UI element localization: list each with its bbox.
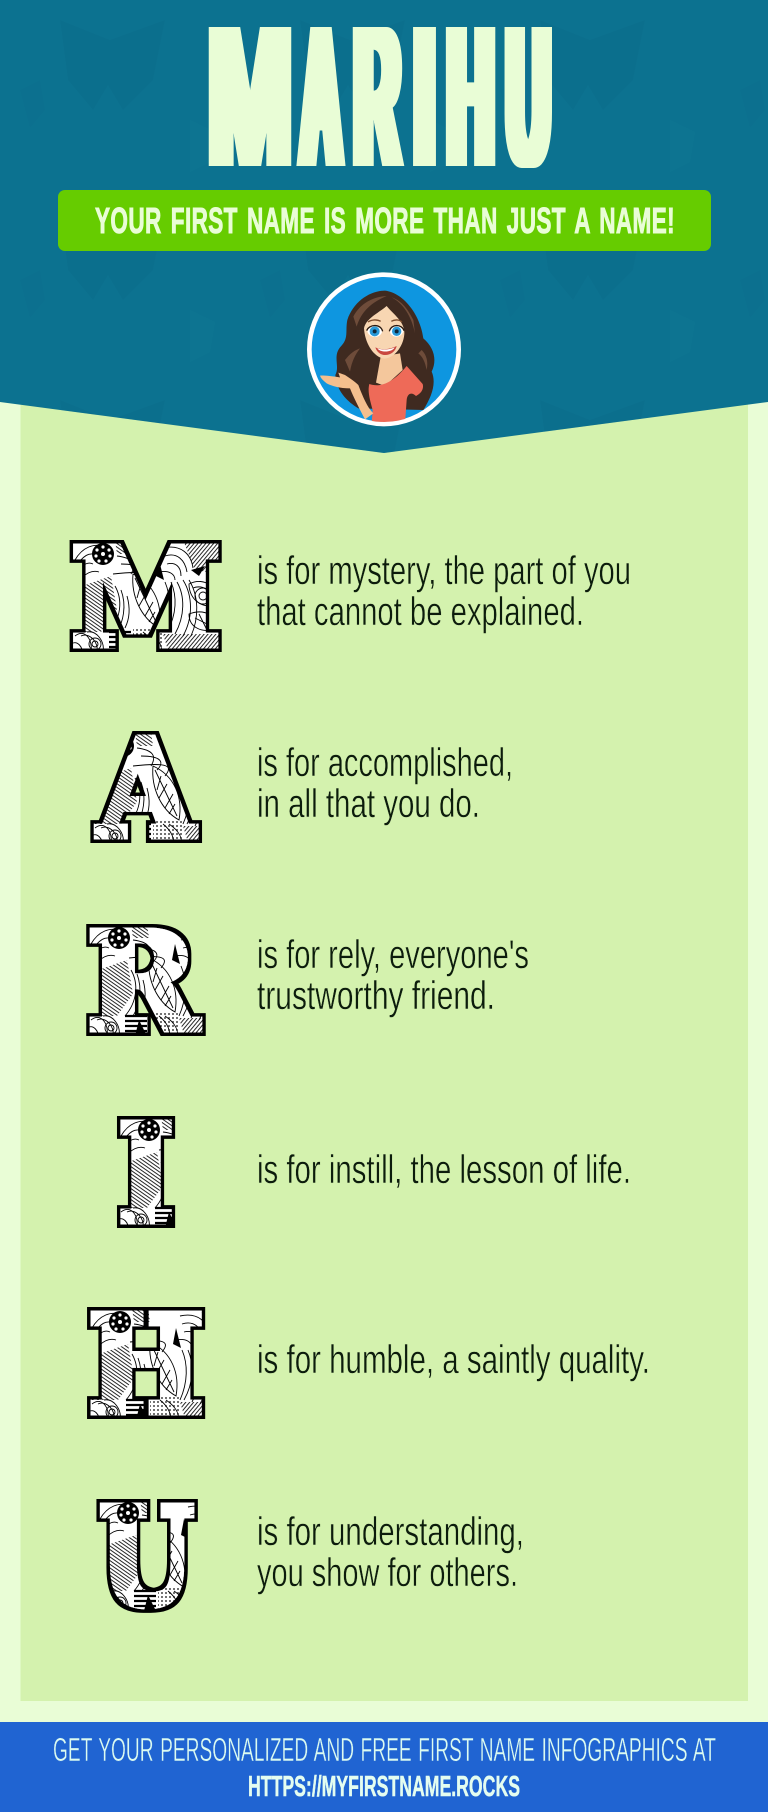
header banner [0, 0, 768, 453]
face [364, 306, 404, 359]
eyes [367, 326, 382, 337]
text: R line: trustworthy friend. [257, 974, 495, 1018]
neck and chest [376, 353, 403, 386]
text: U line [257, 1510, 524, 1595]
text: M line: that cannot be explained. [257, 590, 584, 634]
letter I: I [118, 1096, 174, 1252]
letter row: A [97, 712, 513, 868]
letter R: R [88, 904, 199, 1060]
text: U line: is for understanding, [257, 1510, 524, 1554]
letter row: H [88, 1288, 650, 1444]
letter U: U [100, 1480, 194, 1636]
arm and hand [320, 373, 373, 419]
letter row: M [72, 520, 631, 676]
shirt [369, 366, 423, 423]
text: A line [257, 741, 513, 826]
text: A line: in all that you do. [257, 782, 480, 826]
mouth [375, 346, 397, 355]
text: R line: is for rely, everyone's [257, 933, 529, 977]
letter row: I [118, 1096, 631, 1252]
text: R line [257, 933, 529, 1018]
tagline bar [58, 190, 711, 251]
text: A line: is for accomplished, [257, 741, 513, 785]
text: U line: you show for others. [257, 1551, 518, 1595]
hair [335, 291, 434, 410]
letter row: R [88, 904, 529, 1060]
text: I line: is for instill, the lesson of life. [257, 1148, 631, 1192]
footer [0, 1722, 768, 1812]
letter M: M [72, 520, 220, 676]
text: M line [257, 549, 631, 634]
letter H: H [88, 1288, 204, 1444]
letter A: A [97, 712, 195, 868]
icon: woman avatar [309, 275, 459, 424]
footer url: HTTPS://MYFIRSTNAME.ROCKS [248, 1771, 520, 1803]
text: M line: is for mystery, the part of you [257, 549, 631, 593]
letter row: U [100, 1480, 524, 1636]
